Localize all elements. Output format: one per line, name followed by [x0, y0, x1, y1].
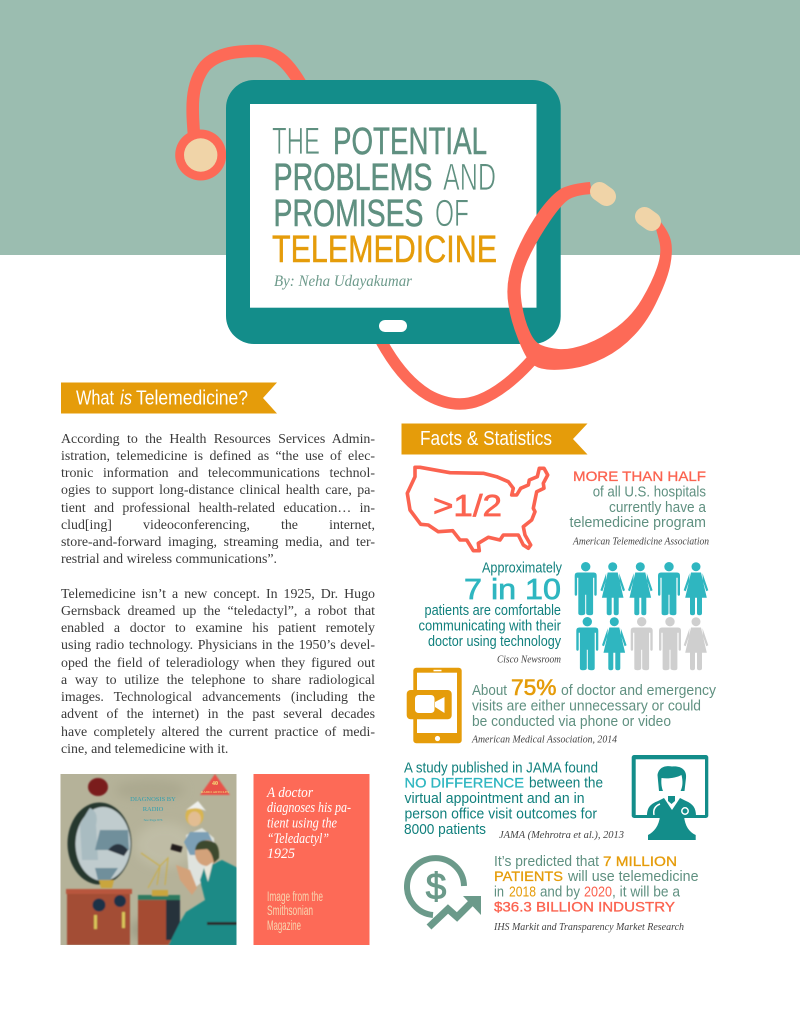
stat: JAMA study [404, 760, 624, 841]
stat: 75% of visits: American Medical Association, 2014 [471, 735, 618, 746]
stat: 7 million patients, $36.3 billion: and by [540, 884, 580, 901]
text block: definition of telemedicine: According to the Health Resources Services Admin- [61, 432, 375, 446]
stat: JAMA study: JAMA (Mehrotra et al.), 2013 [499, 830, 624, 841]
tablet device [226, 80, 561, 344]
panel: image caption: diagnoses his pa- [267, 800, 351, 816]
stat: 7 million patients, $36.3 billion [493, 853, 698, 933]
text block: definition of telemedicine: clud[ing] videoconferencing, the internet, [61, 518, 375, 533]
title: TELEMEDICINE [272, 229, 497, 271]
icon: US map with >1/2: >1/2 [433, 488, 502, 523]
panel: image caption: Image from the [267, 888, 323, 904]
banner: What is Telemedicine?: What [76, 386, 114, 410]
text block: history of telemedicine: images. Technological advancements (including the [61, 690, 375, 705]
icon: dollar with rising arrow: $ [426, 866, 446, 907]
stat: 7 million patients, $36.3 billion: , it will be a [612, 884, 681, 901]
text block: history of telemedicine: a way to utilize the telephone to share radiological [61, 673, 375, 688]
text block: history of telemedicine: have completely altered the current practice of medi- [61, 724, 375, 740]
icon: US map with >1/2 [407, 467, 548, 551]
stat: 75% of visits: of doctor and emergency [561, 682, 716, 699]
title: PROMISES [274, 193, 424, 235]
stat: more than half of hospitals: telemedicine program [570, 514, 706, 531]
banner: What is Telemedicine?: is [120, 386, 132, 410]
magazine cover illustration: See Page 876 [144, 818, 163, 822]
title [272, 121, 497, 271]
text block: history of telemedicine: advent of the internet) in the past several decades [61, 707, 375, 722]
stat: more than half of hospitals: MORE THAN HALF [573, 469, 706, 484]
panel: image caption: 1925 [267, 846, 295, 862]
title: THE [272, 121, 320, 163]
icon: doctor on a monitor [632, 755, 708, 840]
text block: definition of telemedicine: tient and professional health-related education… in- [61, 500, 375, 516]
text block: definition of telemedicine: istration, telemedicine is defined as “the use of elec- [61, 449, 375, 464]
stat: more than half of hospitals: American Telemedicine Association [572, 537, 709, 548]
title: AND [443, 157, 496, 199]
stat: 75% of visits: visits are either unnecessary or could [472, 698, 701, 715]
stat: 7 in 10 patients: Cisco Newsroom [497, 655, 561, 666]
text block: history of telemedicine: using radio technology. Physicians in the 1950’s devel- [61, 638, 375, 653]
stat: 7 million patients, $36.3 billion: PATIENTS [494, 869, 563, 884]
stat: 7 million patients, $36.3 billion: IHS Markit and Transparency Market Research [493, 922, 684, 933]
stat: 75% of visits [471, 675, 716, 746]
stat: 7 million patients, $36.3 billion: It’s predicted that [494, 853, 600, 870]
stat: JAMA study: between the [529, 775, 603, 792]
stat: 7 in 10 patients: Approximately [482, 560, 562, 577]
magazine cover illustration: 40 [212, 781, 218, 787]
stat: 7 million patients, $36.3 billion: $36.3 BILLION INDUSTRY [494, 900, 675, 915]
title: OF [435, 193, 469, 235]
stat: JAMA study: virtual appointment and an in [404, 790, 584, 807]
banner: What is Telemedicine? [61, 382, 277, 414]
stat: 7 in 10 patients [418, 560, 562, 666]
stat: JAMA study: person office visit outcomes for [404, 806, 597, 823]
stat: 75% of visits: 75% [511, 675, 556, 700]
text block: history of telemedicine: enabled a doctor to examine his patient remotely [61, 621, 375, 636]
stat: 7 in 10 patients: patients are comfortable [424, 602, 561, 619]
stat: 7 in 10 patients: communicating with their [418, 618, 561, 635]
panel: image caption: Magazine [267, 917, 301, 933]
text block: history of telemedicine [61, 586, 375, 757]
stat: more than half of hospitals [570, 469, 709, 548]
title: POTENTIAL [333, 121, 487, 163]
stat: JAMA study: NO DIFFERENCE [404, 776, 524, 791]
stat: 7 million patients, $36.3 billion: in [494, 884, 504, 901]
text block: definition of telemedicine: ogies to support long-distance clinical health care, pa- [61, 483, 375, 498]
stethoscope: rear tubing [193, 51, 532, 404]
magazine cover illustration: RADIO ARTICLES [201, 790, 229, 794]
stat: 7 in 10 patients: 7 in 10 [464, 574, 561, 606]
text block: definition of telemedicine: restrial and wireless communications”. [61, 552, 277, 567]
panel: image caption: Smithsonian [267, 902, 313, 918]
stethoscope: ear tips [600, 192, 652, 222]
stethoscope: chest piece [175, 130, 226, 180]
stat: 7 in 10 patients: doctor using technology [428, 633, 561, 650]
banner: Facts & Statistics: Facts & Statistics [420, 427, 552, 450]
stat: JAMA study: 8000 patients [404, 821, 486, 838]
icon: tablet with video camera [407, 668, 462, 743]
stat: 75% of visits: About [472, 682, 508, 699]
byline: By: Neha Udayakumar [274, 273, 413, 290]
text block: history of telemedicine: Telemedicine isn’t a new concept. In 1925, Dr. Hugo [61, 586, 375, 602]
stat: 7 million patients, $36.3 billion: 7 MILLION [603, 854, 677, 869]
text block: history of telemedicine: oped the field of teleradiology when they figured out [61, 656, 375, 670]
pictogram: 7 of 10 people [575, 562, 708, 670]
text block: definition of telemedicine [61, 432, 375, 567]
title: PROBLEMS [274, 157, 432, 199]
stat: 7 million patients, $36.3 billion: 2020 [584, 884, 612, 901]
stat: more than half of hospitals: of all U.S. hospitals [593, 484, 706, 501]
magazine cover illustration: RADIO [143, 806, 164, 813]
magazine cover illustration: DIAGNOSIS BY [130, 796, 176, 803]
icon: dollar with rising arrow [407, 858, 481, 927]
stat: JAMA study: A study published in JAMA found [404, 760, 598, 777]
panel: image caption: A doctor [266, 785, 313, 801]
magazine cover illustration [60, 774, 238, 946]
text block: history of telemedicine: Gernsback dreamed up the “teledactyl”, a robot that [61, 604, 375, 619]
banner: What is Telemedicine?: Telemedicine? [136, 386, 248, 410]
panel: image caption: tient using the [267, 816, 337, 832]
stethoscope: front tubing [507, 182, 672, 370]
panel: image caption: “Teledactyl” [267, 831, 329, 847]
stat: 75% of visits: be conducted via phone or video [472, 713, 671, 730]
panel: image caption [254, 774, 370, 945]
text block: history of telemedicine: cine, and telemedicine with it. [61, 742, 228, 757]
banner: Facts & Statistics [402, 424, 588, 454]
stat: more than half of hospitals: currently have a [609, 499, 707, 516]
text block: definition of telemedicine: tronic information and telecommunications technol- [61, 466, 375, 481]
stat: 7 million patients, $36.3 billion: will use telemedicine [567, 868, 698, 885]
stat: 7 million patients, $36.3 billion: 2018 [509, 884, 536, 901]
text block: definition of telemedicine: store-and-forward imaging, streaming media, and ter- [61, 535, 375, 550]
header band [0, 0, 800, 255]
